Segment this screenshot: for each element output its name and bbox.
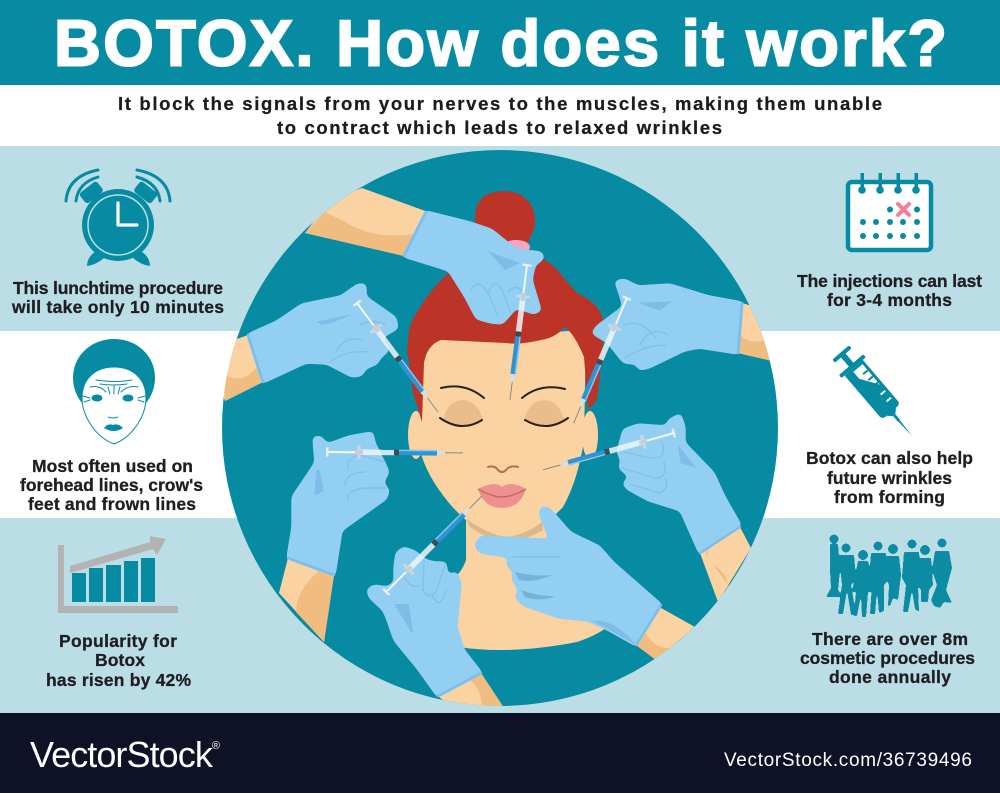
- text: popularity: Popularity for: [59, 631, 177, 651]
- eyelashes and brows: [440, 386, 568, 426]
- text: popularity: Botox: [95, 650, 145, 670]
- panel: prevention: [806, 342, 973, 507]
- panel: treated areas: [20, 339, 203, 514]
- text: prevention: future wrinkles: [827, 468, 952, 488]
- neck shadow: [466, 519, 543, 541]
- footer url: VectorStock.com/36739496: [724, 750, 972, 771]
- icon: rising bar chart: [58, 536, 178, 613]
- panel: annual procedures: [800, 534, 975, 687]
- text: duration: The injections can last: [797, 271, 982, 291]
- footer logo: VectorStock: [30, 734, 213, 775]
- text: annual procedures: There are over 8m: [812, 629, 968, 649]
- eyelids: [443, 400, 564, 426]
- text: lunchtime: will take only 10 minutes: [11, 297, 224, 317]
- panel: lunchtime procedure: [11, 170, 224, 317]
- glove: upper-right hand: [593, 280, 742, 369]
- arms: [215, 188, 772, 708]
- icon: calendar: [848, 173, 931, 250]
- text: treated areas: Most often used on: [32, 456, 193, 476]
- face: [420, 330, 586, 538]
- panel: popularity: [46, 536, 191, 690]
- hair: [407, 258, 604, 422]
- text: treated areas: feet and frown lines: [28, 494, 196, 514]
- syringes held in the hands: [326, 263, 677, 598]
- nose: [488, 466, 518, 472]
- text: popularity: [46, 631, 191, 690]
- header banner: [0, 0, 1000, 85]
- central illustration: woman receiving injections: [215, 150, 778, 708]
- text: treated areas: forehead lines, crow's: [20, 475, 203, 495]
- text: annual procedures: done annually: [829, 667, 951, 687]
- text: prevention: from forming: [834, 487, 945, 507]
- icon: crowd silhouettes: [826, 534, 952, 617]
- lips: [478, 484, 526, 508]
- glove: lower-right hand: [618, 415, 740, 553]
- glove: pointing hand: [476, 507, 661, 645]
- text: annual procedures: [800, 629, 975, 687]
- text: lunchtime: This lunchtime procedure: [13, 278, 223, 298]
- glove: lower-centre hand: [368, 548, 481, 696]
- neck and chest: [452, 515, 606, 650]
- icon: syringe: [829, 342, 924, 447]
- panel: duration: [797, 173, 982, 310]
- icon: alarm clock: [66, 170, 170, 266]
- subtitle: It block the signals from your nerves to the muscles, making them unable: [118, 93, 882, 114]
- text: prevention: [806, 448, 973, 507]
- hair bun: [475, 191, 535, 254]
- ears: [408, 411, 598, 459]
- text: prevention: Botox can also help: [806, 448, 973, 468]
- subtitle: [118, 93, 882, 138]
- text: lunchtime: [11, 278, 224, 317]
- text: duration: for 3-4 months: [827, 290, 952, 310]
- subtitle: to contract which leads to relaxed wrinkles: [277, 117, 722, 138]
- glove: top hand: [404, 212, 543, 323]
- text: annual procedures: cosmetic procedures: [800, 648, 975, 668]
- text: treated areas: [20, 456, 203, 514]
- glove: upper-left hand: [248, 285, 397, 382]
- text: popularity: has risen by 42%: [46, 670, 191, 690]
- title: BOTOX. How does it work?: [54, 6, 947, 80]
- footer logo: ®: [212, 740, 220, 752]
- footer band: [0, 713, 1000, 793]
- glove: lower-left hand: [288, 433, 388, 575]
- text: duration: [797, 271, 982, 310]
- icon: face with wrinkles: [73, 339, 155, 444]
